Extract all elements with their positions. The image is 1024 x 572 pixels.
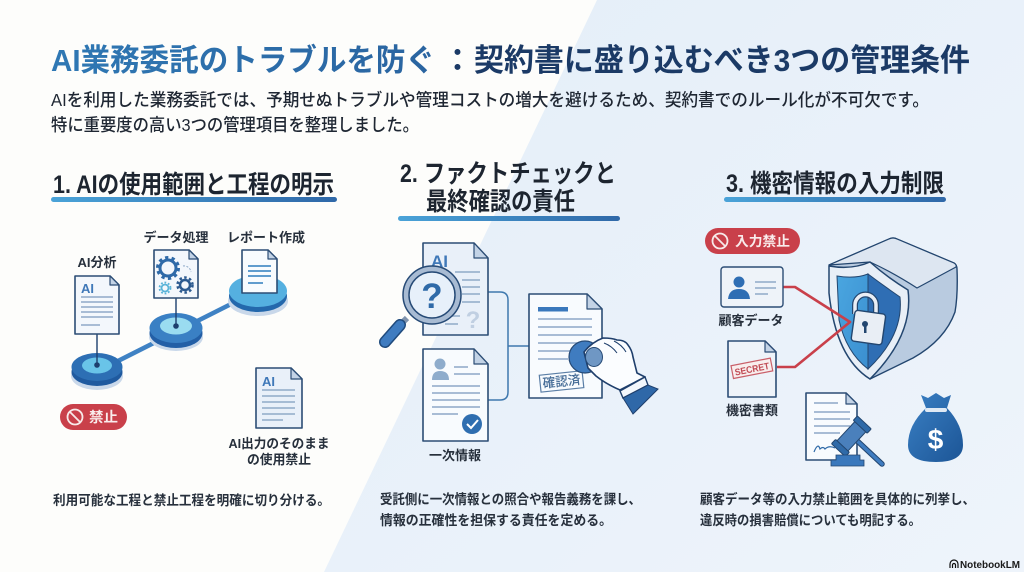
document: AI分析 bbox=[75, 276, 119, 334]
intro text: 特に重要度の高い3つの管理項目を整理しました。 bbox=[51, 115, 419, 135]
disc 3 bbox=[228, 275, 288, 316]
label: 機密書類: 機密書類 bbox=[726, 403, 778, 418]
heading 3: 3. 機密情報の入力制限 bbox=[726, 170, 944, 198]
input prohibited badge bbox=[705, 228, 800, 254]
document: AI output: AI bbox=[262, 374, 275, 389]
input prohibited badge: 入力禁止 bbox=[735, 233, 790, 249]
document: gears bbox=[154, 250, 198, 298]
title bbox=[51, 43, 970, 78]
label: 一次情報: 一次情報 bbox=[429, 448, 481, 463]
disc 1 bbox=[71, 353, 123, 390]
label: AI output prohibited bbox=[228, 436, 330, 467]
NotebookLM watermark: NotebookLM bbox=[960, 559, 1020, 571]
heading 2: 最終確認の責任 bbox=[426, 188, 575, 216]
document: primary source bbox=[423, 349, 488, 441]
heading 1: 1. AIの使用範囲と工程の明示 bbox=[53, 171, 334, 199]
title: ： bbox=[442, 43, 473, 78]
icon: money bag: $ bbox=[928, 424, 944, 455]
disc 2 bbox=[149, 313, 203, 351]
document: secret bbox=[728, 341, 776, 397]
card: customer data bbox=[721, 267, 783, 307]
background diagonal panel bbox=[324, 0, 1024, 572]
icon: hand with stamp bbox=[569, 338, 658, 414]
title: 契約書に盛り込むべき3つの管理条件 bbox=[474, 43, 970, 78]
description 2 bbox=[380, 491, 641, 528]
document: AI draft: ? bbox=[466, 307, 480, 334]
icon: magnifier: ? bbox=[421, 277, 443, 316]
intro text bbox=[51, 90, 929, 135]
label: AI分析: AI分析 bbox=[77, 255, 117, 270]
document: secret: SECRET bbox=[734, 361, 771, 379]
document: AI output bbox=[256, 368, 302, 428]
icon: money bag bbox=[908, 393, 963, 462]
title: AI業務委託のトラブルを防ぐ bbox=[51, 43, 435, 78]
label: AI output prohibited: の使用禁止 bbox=[247, 452, 311, 467]
document: AI分析: AI bbox=[81, 281, 94, 296]
label: 顧客データ: 顧客データ bbox=[718, 313, 784, 328]
heading 2: 2. ファクトチェックと bbox=[400, 160, 616, 188]
icon: shield block bbox=[829, 238, 957, 379]
process line bbox=[110, 297, 245, 365]
description 2: 受託側に一次情報との照合や報告義務を課し、 bbox=[380, 491, 641, 507]
description 3: 違反時の損害賠償についても明記する。 bbox=[700, 512, 921, 528]
prohibited badge: 禁止 bbox=[89, 409, 118, 425]
heading 2 bbox=[398, 160, 620, 221]
panel: 1 AI usage scope bbox=[51, 171, 337, 508]
document: confirmed bbox=[529, 294, 602, 398]
document: report bbox=[242, 250, 277, 293]
panel: 2 fact check bbox=[380, 160, 658, 528]
document: AI draft bbox=[423, 243, 488, 335]
description 3 bbox=[700, 491, 975, 528]
stems bbox=[96, 334, 98, 365]
document: AI draft: AI bbox=[431, 252, 448, 271]
description 1: 利用可能な工程と禁止工程を明確に切り分ける。 bbox=[53, 492, 330, 508]
icon: magnifier bbox=[385, 266, 461, 342]
label: データ処理: データ処理 bbox=[143, 230, 209, 245]
stamp: 確認済: 確認済 bbox=[542, 372, 581, 391]
red prohibition connector bbox=[777, 287, 850, 367]
description 2: 情報の正確性を担保する責任を定める。 bbox=[380, 512, 612, 528]
icon: gavel bbox=[831, 416, 882, 466]
document: contract bbox=[806, 393, 857, 460]
connector bbox=[488, 292, 529, 400]
icon: padlock bbox=[851, 294, 886, 345]
label: AI output prohibited: AI出力のそのまま bbox=[228, 436, 330, 451]
prohibited badge bbox=[60, 404, 127, 430]
intro text: AIを利用した業務委託では、予期せぬトラブルや管理コストの増大を避けるため、契約書でのルール化が不可欠です。 bbox=[51, 90, 929, 110]
panel: 3 confidential info bbox=[700, 170, 975, 528]
description 3: 顧客データ等の入力禁止範囲を具体的に列挙し、 bbox=[700, 491, 975, 507]
label: レポート作成: レポート作成 bbox=[227, 230, 305, 245]
